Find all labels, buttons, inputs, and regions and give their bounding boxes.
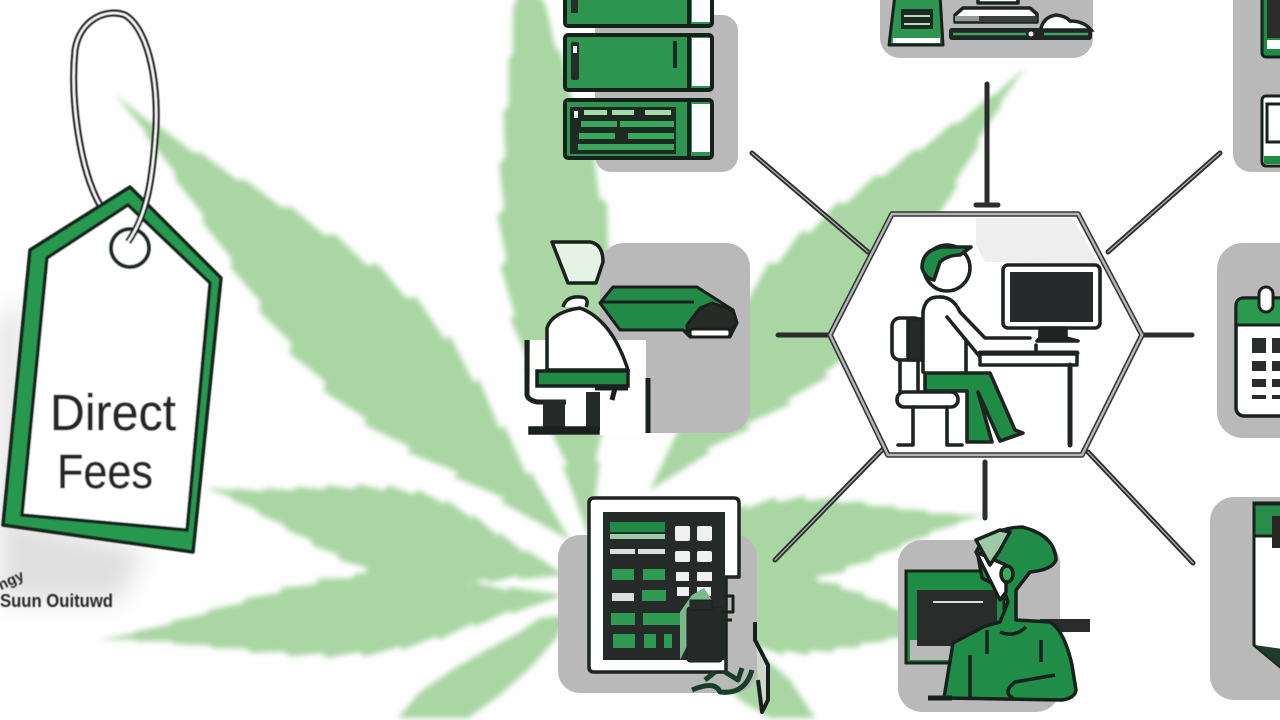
screen [603,512,725,660]
date grid [1252,338,1280,399]
hair [922,247,971,280]
icon: server racks (top left) [565,0,738,172]
tablet frame [589,498,739,672]
icon: devices (top right) [1233,0,1280,172]
keyboard bar [949,28,1092,40]
desk bar [1040,619,1090,632]
panel [898,540,1060,712]
tag string front strand [128,140,155,242]
tag hole [111,229,149,267]
panel [1233,0,1280,172]
icon: reclining seat and vehicle (left) [527,242,750,435]
tag inner label [22,205,210,530]
device [889,0,943,45]
monitor [1003,265,1100,328]
panel [1217,243,1280,438]
head [924,245,970,291]
icon: person with headset (bottom centre) [898,527,1090,712]
person [928,527,1076,700]
price tag: Direct Fees [3,13,221,552]
white lower patch [530,340,646,435]
seat [527,297,648,433]
icon: calculator tablet (bottom) [558,498,768,712]
icon: document (bottom right) [1210,497,1280,700]
binder ring [1259,287,1273,312]
calendar page [1236,298,1280,416]
legs [925,373,1023,442]
rack 2 [565,35,712,90]
panel [1210,497,1280,700]
rack 1 [565,0,712,26]
chair [892,318,962,445]
tag label text: Fees [57,446,153,499]
desk [980,354,1077,365]
tag body [3,187,221,552]
document header [1254,504,1280,536]
panel [600,243,750,433]
spokes [752,84,1220,563]
caption under tag [0,567,113,611]
monitor [906,571,1004,663]
central hexagon [830,214,1142,455]
tag string back strand [74,13,156,205]
background soft shade at left [0,300,145,600]
screen rows [610,522,712,648]
person at computer [892,245,1100,445]
lower fold [1254,645,1280,675]
panel [880,0,1093,58]
glare patch [976,218,1100,265]
torso and arm [923,297,1030,372]
vehicle [600,287,737,337]
hand holding device [680,588,768,712]
mouse [1041,15,1091,30]
hexagon frame [830,214,1142,455]
tag label text [50,384,176,499]
icon: desk set (top centre) [880,0,1093,58]
clip [1272,516,1280,548]
hood [552,242,603,283]
printer [955,0,1037,22]
rack 3 [565,100,712,158]
calendar header [1236,298,1280,325]
panel [558,535,757,693]
tag label text: Direct [50,384,176,441]
icon: calendar (right) [1217,243,1280,438]
cannabis leaf background [69,0,1071,718]
panel [595,15,738,172]
caption under tag: Suun Ouituwd [0,591,113,611]
document [1254,503,1280,675]
